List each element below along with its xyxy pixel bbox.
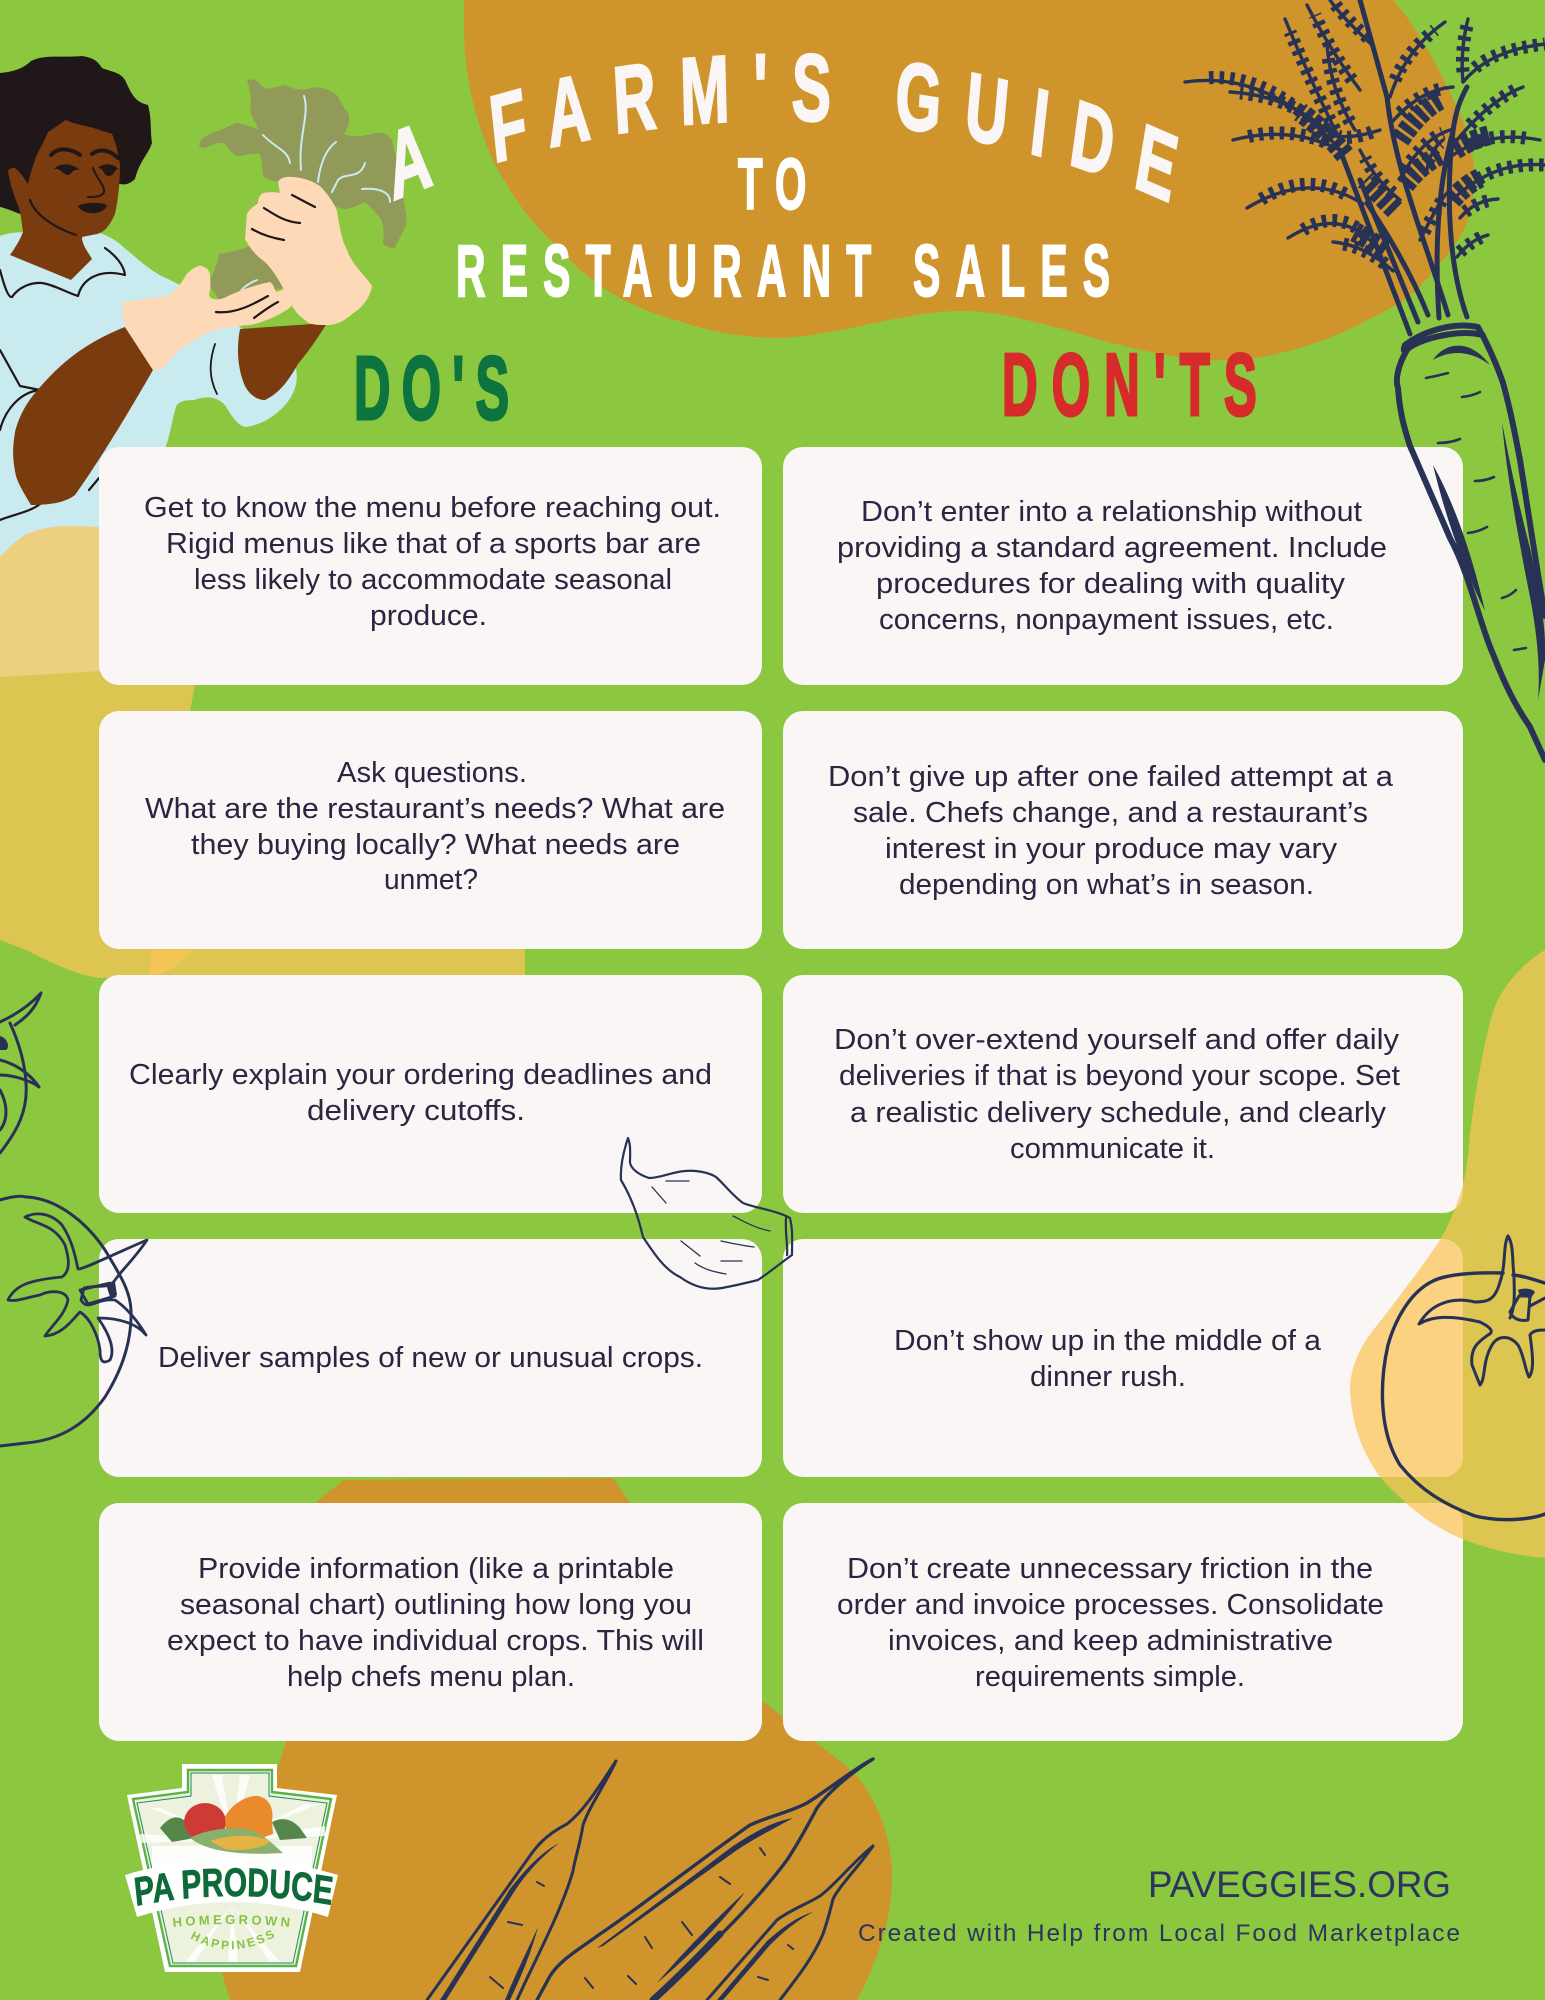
card: don't 5	[783, 1503, 1463, 1741]
logo banner	[125, 1860, 338, 1917]
logo pepper	[225, 1796, 273, 1838]
card: do 2: they buying locally? What needs are	[191, 829, 680, 861]
card: do 5	[99, 1503, 762, 1741]
card: don't 5: order and invoice processes. Consolidate	[837, 1589, 1384, 1621]
blob: yellow left lower	[149, 729, 525, 1100]
carrot b	[537, 1759, 873, 2000]
card: do 2: Ask questions.	[337, 757, 527, 789]
card: don't 1: providing a standard agreement. Include	[837, 532, 1387, 564]
title line: restaurant sales: RESTAURANT SALES	[456, 229, 1110, 312]
card: don't 1: procedures for dealing with quality	[876, 568, 1346, 600]
card: do 5: help chefs menu plan.	[287, 1661, 575, 1693]
icon: sweet potato outline	[621, 1138, 792, 1289]
shirt	[0, 232, 297, 677]
carrot a	[427, 1761, 616, 2000]
carrot stems	[1340, 0, 1467, 334]
icon: carrots bottom	[427, 1759, 873, 2000]
title	[393, 52, 1178, 312]
sleeve crease	[211, 344, 217, 394]
card: do 3: Clearly explain your ordering deadlines and	[129, 1059, 712, 1091]
card: do 5: expect to have individual crops. This will	[167, 1625, 704, 1657]
card: do 2: What are the restaurant’s needs? What are	[145, 793, 725, 825]
blob: ochre bottom	[222, 1478, 892, 2000]
card: don't 3	[783, 975, 1463, 1213]
icon: tomato left lower	[0, 1196, 147, 1446]
card: do 1: produce.	[370, 600, 487, 632]
card: do 4	[99, 1239, 762, 1477]
carrot c	[707, 1846, 873, 2000]
leafy greens	[198, 79, 406, 300]
panel: don'ts cards	[783, 447, 1463, 1741]
card: do 1: Get to know the menu before reaching out.	[144, 492, 721, 524]
carrot skin marks	[1426, 373, 1526, 650]
card: don't 2: interest in your produce may vary	[885, 833, 1338, 865]
shirt collar lines	[0, 248, 125, 520]
left forearm	[13, 327, 153, 505]
card: don't 3: a realistic delivery schedule, and clearly	[850, 1097, 1387, 1129]
blob: yellow right	[1350, 950, 1545, 1558]
footer: credit: Created with Help from Local Food Marketplace	[858, 1920, 1460, 1947]
icon: tomato right	[1382, 1236, 1545, 1520]
card: don't 1	[783, 447, 1463, 685]
logo name	[134, 1868, 333, 1906]
card: don't 2	[783, 711, 1463, 949]
card: don't 3: communicate it.	[1010, 1133, 1215, 1165]
right forearm	[238, 323, 327, 400]
card: don't 3: deliveries if that is beyond your scope. Set	[839, 1060, 1400, 1092]
card: don't 5: Don’t create unnecessary friction in the	[847, 1553, 1373, 1585]
card: don't 2: sale. Chefs change, and a restaurant’s	[853, 797, 1368, 829]
face and neck	[8, 120, 120, 280]
logo tagline second line: HAPPINESS	[190, 1930, 274, 1950]
card: don't 2: Don’t give up after one failed attempt at a	[828, 761, 1394, 793]
logo leaves	[160, 1817, 307, 1842]
logo tagline second line	[190, 1930, 274, 1950]
logo: pa produce	[125, 1764, 338, 1972]
card: don't 3: Don’t over-extend yourself and offer daily	[834, 1024, 1400, 1056]
logo keystone inner	[133, 1770, 331, 1966]
finger lines	[216, 195, 315, 318]
logo corn	[190, 1828, 283, 1854]
logo name: PA PRODUCE	[134, 1868, 333, 1906]
card: do 2	[99, 711, 762, 949]
card: do 4: Deliver samples of new or unusual crops.	[158, 1342, 703, 1374]
logo tagline: HOMEGROWN	[173, 1914, 290, 1927]
card: don't 4: dinner rush.	[1030, 1361, 1186, 1393]
card: do 1: Rigid menus like that of a sports bar are	[166, 528, 701, 560]
facial features	[30, 149, 119, 235]
logo tomato	[184, 1803, 226, 1841]
card: do 3: delivery cutoffs.	[307, 1095, 525, 1127]
panel: do's cards	[99, 447, 762, 1741]
card: do 5: Provide information (like a printable	[198, 1553, 674, 1585]
logo keystone	[127, 1764, 337, 1972]
footer: website: PAVEGGIES.ORG	[1148, 1864, 1451, 1905]
card: don't 5: invoices, and keep administrative	[888, 1625, 1333, 1657]
blob: ochre top	[464, 0, 1474, 360]
icon: carrot top right	[1185, 0, 1545, 760]
carrot body	[1397, 326, 1545, 760]
illustration: farmer holding greens	[0, 56, 406, 677]
card: do 5: seasonal chart) outlining how long you	[180, 1589, 692, 1621]
hair	[0, 56, 152, 214]
title line: to: TO	[738, 145, 806, 225]
card: don't 4: Don’t show up in the middle of a	[894, 1325, 1322, 1357]
carrot foliage	[1185, 0, 1545, 271]
card: don't 2: depending on what’s in season.	[899, 869, 1314, 901]
card: do 3	[99, 975, 762, 1213]
card: do 1: less likely to accommodate seasonal	[194, 564, 672, 596]
card: do 2: unmet?	[384, 864, 478, 896]
title line: a farm's guide: A FARM'S GUIDE	[393, 52, 1178, 204]
blob: yellow left upper	[0, 526, 208, 978]
logo sunburst	[140, 1775, 325, 1962]
heading: don'ts: DON'TS	[1002, 336, 1257, 435]
logo tagline	[173, 1914, 290, 1927]
open hand	[122, 266, 292, 370]
card: don't 4	[783, 1239, 1463, 1477]
card: don't 1: concerns, nonpayment issues, etc.	[879, 604, 1334, 636]
heading: do's: DO'S	[354, 339, 509, 439]
icon: tomato left upper	[0, 993, 41, 1153]
card: do 1	[99, 447, 762, 685]
leaf veins	[238, 96, 390, 297]
raised hand	[245, 177, 372, 325]
carrot inner lines	[1433, 422, 1545, 700]
card: don't 5: requirements simple.	[975, 1661, 1245, 1693]
card: don't 1: Don’t enter into a relationship without	[861, 496, 1362, 528]
